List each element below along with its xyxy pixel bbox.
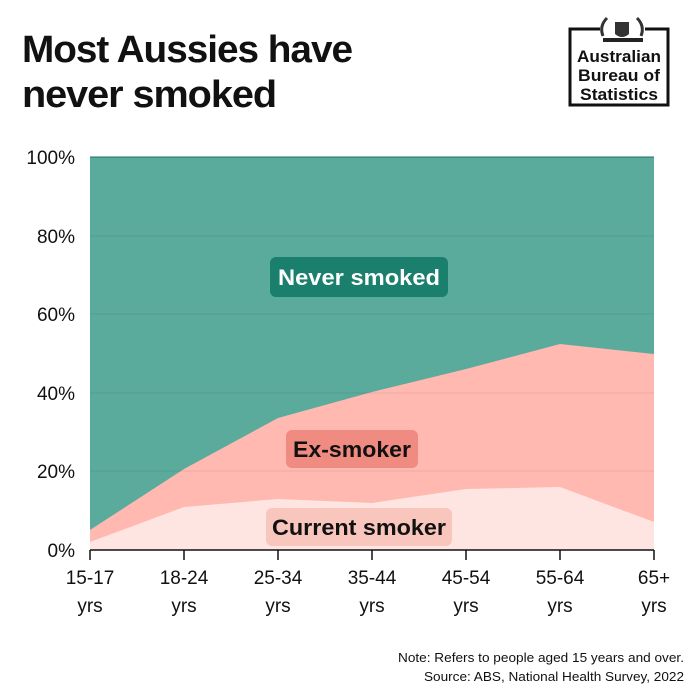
- x axis labels: 65+: [638, 568, 670, 589]
- x axis labels: [66, 550, 670, 617]
- title: never smoked: [22, 74, 276, 116]
- x axis labels: yrs: [453, 596, 479, 617]
- title: Most Aussies have: [22, 29, 352, 71]
- y axis labels: 80%: [37, 227, 75, 248]
- note and source: [398, 650, 684, 684]
- x axis labels: yrs: [77, 596, 103, 617]
- y axis labels: 40%: [37, 384, 75, 405]
- note and source: Source: ABS, National Health Survey, 2022: [424, 669, 684, 684]
- label: never smoked: [270, 257, 448, 297]
- x axis labels: 45-54: [442, 568, 491, 589]
- x axis labels: yrs: [547, 596, 573, 617]
- label: current smoker: Current smoker: [272, 515, 446, 540]
- x axis labels: 15-17: [66, 568, 114, 589]
- y axis labels: 60%: [37, 305, 75, 326]
- label: ex-smoker: [286, 430, 418, 468]
- x axis labels: 25-34: [254, 568, 303, 589]
- logo: ABS: Australian: [577, 47, 661, 66]
- x axis labels: yrs: [265, 596, 291, 617]
- label: current smoker: [266, 508, 452, 546]
- x axis labels: yrs: [171, 596, 197, 617]
- y axis labels: 100%: [26, 148, 75, 169]
- y axis labels: 20%: [37, 462, 75, 483]
- x axis labels: yrs: [359, 596, 385, 617]
- y axis labels: [26, 148, 75, 562]
- label: never smoked: Never smoked: [278, 265, 440, 290]
- chart: stacked area: [90, 157, 654, 550]
- y axis labels: 0%: [48, 541, 75, 562]
- note and source: Note: Refers to people aged 15 years and over.: [398, 650, 684, 665]
- x axis labels: 55-64: [536, 568, 585, 589]
- x axis labels: 35-44: [348, 568, 397, 589]
- title: [22, 29, 352, 116]
- x axis labels: 18-24: [160, 568, 209, 589]
- label: ex-smoker: Ex-smoker: [293, 437, 411, 462]
- logo: ABS: Statistics: [580, 85, 658, 104]
- logo: ABS: [570, 18, 668, 105]
- logo: ABS: Bureau of: [578, 66, 660, 85]
- x axis labels: yrs: [641, 596, 667, 617]
